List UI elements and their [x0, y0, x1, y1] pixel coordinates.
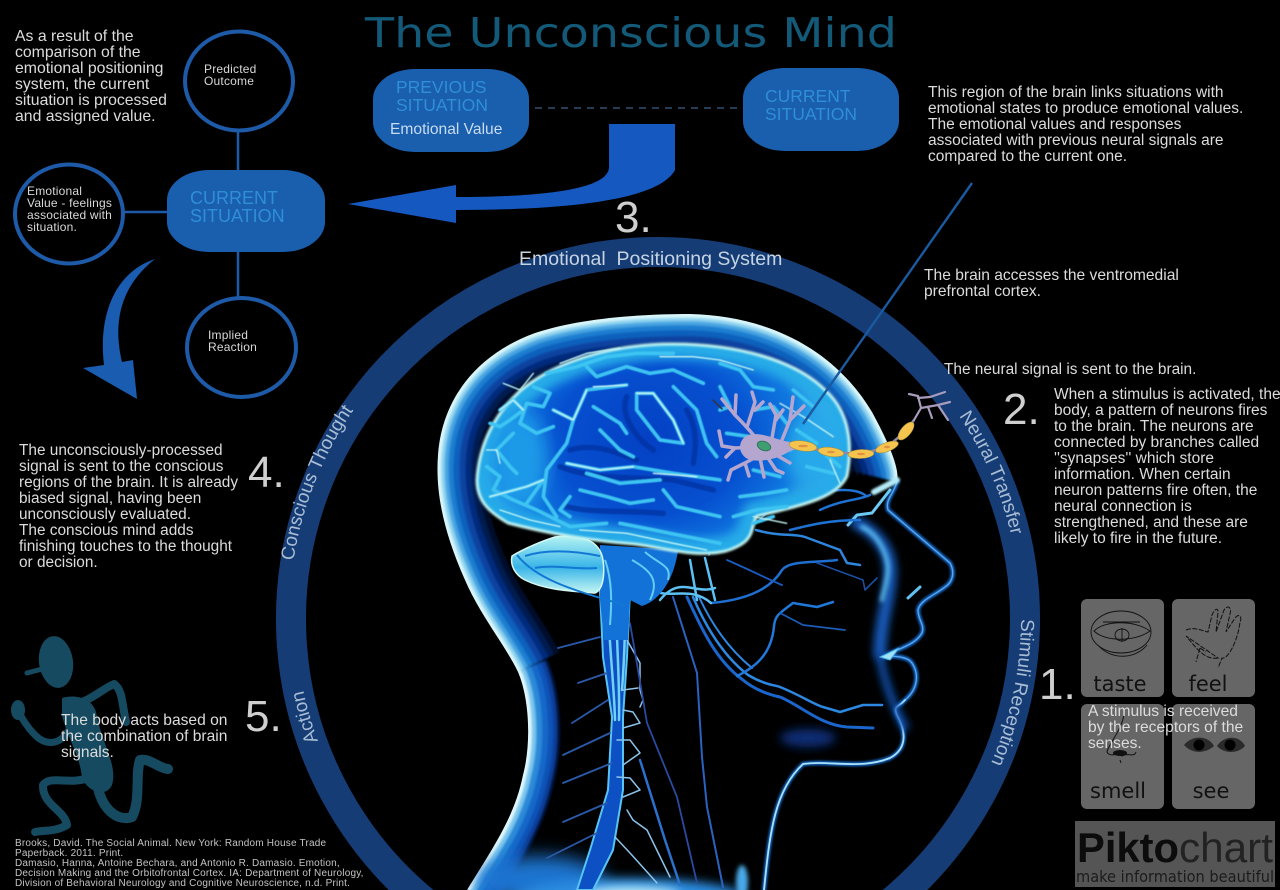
- icon: running figure: [11, 634, 168, 832]
- citations: Brooks, David. The Social Animal. New York: Random House Trade: [15, 838, 326, 849]
- text block: ventromedial region: The emotional values and responses: [928, 116, 1181, 133]
- neuron soma: [740, 434, 812, 461]
- text block: action: the combination of brain: [61, 728, 227, 745]
- text block: neural transfer: likely to fire in the future.: [1054, 530, 1222, 547]
- text block: step 4 result of comparison: system, the current: [15, 76, 149, 93]
- label: emotional value: associated with: [27, 208, 112, 222]
- panel: feel: [1172, 599, 1255, 697]
- circle: implied reaction: [187, 298, 296, 397]
- text block: conscious thought: The unconsciously-processed: [19, 442, 223, 459]
- neuron: [713, 392, 950, 480]
- text block: neural transfer: When a stimulus is activated, the: [1054, 386, 1280, 403]
- label: predicted outcome: Predicted: [204, 62, 256, 76]
- brain stem: [600, 545, 678, 640]
- pointer line from brain to text: [803, 183, 972, 424]
- diagram: current situation associations: SITUATION: [190, 206, 285, 226]
- text block: neural transfer: strengthened, and these are: [1054, 514, 1248, 531]
- panel: smell: [1081, 704, 1164, 809]
- text block: ventromedial region: compared to the current one.: [928, 148, 1127, 165]
- spinal cord and nerves: [547, 450, 882, 890]
- box: previous situation: PREVIOUS: [396, 77, 486, 97]
- label: emotional value: situation.: [27, 220, 77, 234]
- face contour: [764, 480, 953, 890]
- text block: stimulus reception: by the receptors of the: [1088, 719, 1243, 736]
- circle: predicted outcome: [185, 32, 293, 130]
- text block: ventromedial region: associated with previous neural signals are: [928, 132, 1224, 149]
- text block: conscious thought: unconsciously evaluated.: [19, 506, 191, 523]
- box: previous situation: SITUATION: [396, 95, 488, 115]
- box: current situation (comparison): CURRENT: [765, 86, 851, 106]
- text block: accesses cortex: The brain accesses the ventromedial: [924, 267, 1179, 284]
- text block: neural transfer: neural connection is: [1054, 498, 1192, 515]
- Piktochart logo: [1075, 821, 1275, 887]
- ring labels: Neural Transfer: [960, 410, 1021, 533]
- panel: see: [1172, 704, 1255, 809]
- cerebellum: [512, 536, 625, 605]
- label: implied reaction: Implied: [208, 328, 248, 342]
- text block: conscious thought: or decision.: [19, 554, 98, 571]
- text block: action: [61, 712, 227, 761]
- neuron nucleus: [756, 439, 772, 453]
- label: implied reaction: Reaction: [208, 340, 257, 354]
- text block: step 4 result of comparison: [15, 28, 167, 125]
- connector lines: [124, 130, 238, 298]
- text block: ventromedial region: This region of the brain links situations with: [928, 84, 1224, 101]
- text block: neural transfer: ''synapses'' which store: [1054, 450, 1214, 467]
- text block: stimulus reception: senses.: [1088, 735, 1142, 752]
- ring label: emotional positioning system: Emotional Positioning System: [519, 248, 782, 270]
- neuron axon myelin segments: [788, 419, 917, 459]
- text block: neural transfer: connected by branches called: [1054, 434, 1259, 451]
- box: previous situation: Emotional Value: [390, 121, 502, 138]
- citations: [15, 838, 364, 889]
- step number 4: 4.: [248, 448, 285, 497]
- panel: feel: feel: [1188, 672, 1228, 696]
- arrow: comparison to current situation: [348, 124, 675, 223]
- text block: conscious thought: signal is sent to the conscious: [19, 458, 223, 475]
- citations: Damasio, Hanna, Antoine Bechara, and Antonio R. Damasio. Emotion,: [15, 858, 340, 869]
- text block: stimulus reception: [1088, 703, 1243, 752]
- text block: step 4 result of comparison: comparison of the: [15, 44, 141, 61]
- circle: emotional value: [15, 164, 123, 264]
- text block: step 4 result of comparison: As a result of the: [15, 28, 134, 45]
- text block: conscious thought: biased signal, having been: [19, 490, 201, 507]
- text block: action: signals.: [61, 744, 114, 761]
- label: emotional value: Value - feelings: [27, 196, 112, 210]
- text block: stimulus reception: A stimulus is received: [1088, 703, 1238, 720]
- ring: process cycle band: [291, 252, 1025, 890]
- title: The Unconscious Mind: [364, 9, 897, 57]
- text block: conscious thought: regions of the brain. It is already: [19, 474, 238, 491]
- text block: accesses cortex: [924, 267, 1179, 300]
- step number 3: 3.: [615, 193, 652, 242]
- label: predicted outcome: [204, 62, 256, 88]
- text block: step 4 result of comparison: situation is processed: [15, 92, 167, 109]
- text block: conscious thought: finishing touches to the thought: [19, 538, 232, 555]
- text block: step 4 result of comparison: and assigned value.: [15, 108, 156, 125]
- step number 1: 1.: [1039, 660, 1076, 709]
- brain wrinkles: [487, 348, 840, 550]
- citations: Paperback. 2011. Print.: [15, 848, 123, 859]
- label: predicted outcome: Outcome: [204, 74, 254, 88]
- box: current situation (comparison): [743, 68, 899, 151]
- text block: accesses cortex: prefrontal cortex.: [924, 283, 1041, 300]
- text block: conscious thought: [19, 442, 238, 571]
- panel: see: see: [1193, 779, 1229, 803]
- text block: ventromedial region: [928, 84, 1243, 165]
- panel: taste: [1081, 599, 1164, 697]
- sense panels: [1081, 599, 1255, 809]
- panel: taste: taste: [1093, 672, 1147, 696]
- brain: [477, 344, 849, 553]
- diagram: current situation associations: [15, 32, 325, 397]
- dashed connector: [535, 107, 741, 109]
- label: emotional value: Emotional: [27, 184, 82, 198]
- text block: conscious thought: The conscious mind adds: [19, 522, 194, 539]
- ring labels: Stimuli Reception: [992, 620, 1034, 765]
- step number 5: 5.: [245, 692, 282, 741]
- label: implied reaction: [208, 328, 257, 354]
- arrow: curved down to conscious stage: [83, 259, 155, 399]
- ring labels: Conscious Thought: [281, 404, 354, 559]
- box: previous situation: [373, 69, 529, 152]
- ring labels: Action: [294, 692, 318, 741]
- text block: neural transfer: body, a pattern of neurons fires: [1054, 402, 1267, 419]
- text block: ventromedial region: emotional states to produce emotional values.: [928, 100, 1243, 117]
- box: current situation: [167, 170, 325, 252]
- citations: Division of Behavioral Neurology and Cognitive Neuroscience, n.d. Print.: [15, 878, 350, 889]
- Piktochart logo: chart: [1179, 824, 1273, 871]
- ring labels: [281, 404, 1034, 765]
- text block: neural transfer: neuron patterns fire often, the: [1054, 482, 1257, 499]
- text block: neural signal: The neural signal is sent to the brain.: [944, 361, 1196, 378]
- text block: action: The body acts based on: [61, 712, 227, 729]
- panel: smell: smell: [1090, 779, 1146, 803]
- text block: step 4 result of comparison: emotional positioning: [15, 60, 163, 77]
- step number 2: 2.: [1003, 385, 1040, 434]
- label: emotional value: [27, 184, 112, 234]
- text block: neural transfer: information. When certain: [1054, 466, 1231, 483]
- head glow outline: [437, 314, 898, 890]
- head and nervous system illustration: [437, 314, 953, 890]
- terminal branches: [909, 392, 950, 420]
- box: current situation (comparison): SITUATION: [765, 104, 857, 124]
- Piktochart logo: Pikto: [1077, 824, 1179, 871]
- text block: neural transfer: to the brain. The neurons are: [1054, 418, 1254, 435]
- text block: neural transfer: [1054, 386, 1280, 547]
- citations: Decision Making and the Orbitofrontal Cortex. IA: Department of Neurology,: [15, 868, 364, 879]
- diagram: current situation associations: CURRENT: [190, 188, 278, 208]
- neuron dendrites: [713, 392, 804, 480]
